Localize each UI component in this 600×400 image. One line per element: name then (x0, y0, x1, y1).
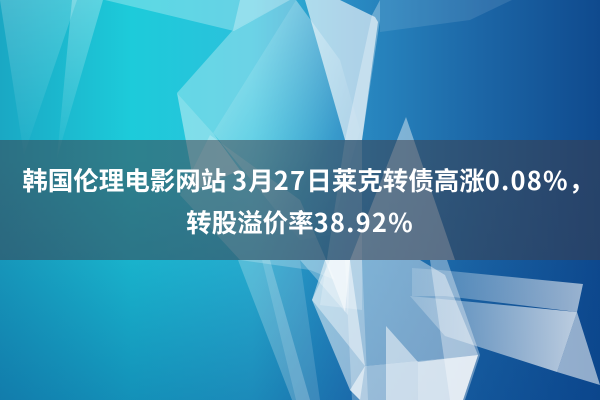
title band (0, 140, 600, 260)
crossing diagonal band under title (180, 135, 335, 400)
title: ， (569, 161, 594, 198)
title: 韩国伦理电影网站 3月27日莱克转债高涨0.08% (22, 161, 569, 198)
centre spike (320, 117, 455, 310)
title: 转股溢价率38.92% (186, 203, 414, 240)
left streak shards (0, 0, 103, 158)
top shard (105, 0, 290, 31)
upper centre facets (177, 0, 512, 240)
title (22, 161, 594, 240)
lower crystal cluster (300, 260, 600, 400)
